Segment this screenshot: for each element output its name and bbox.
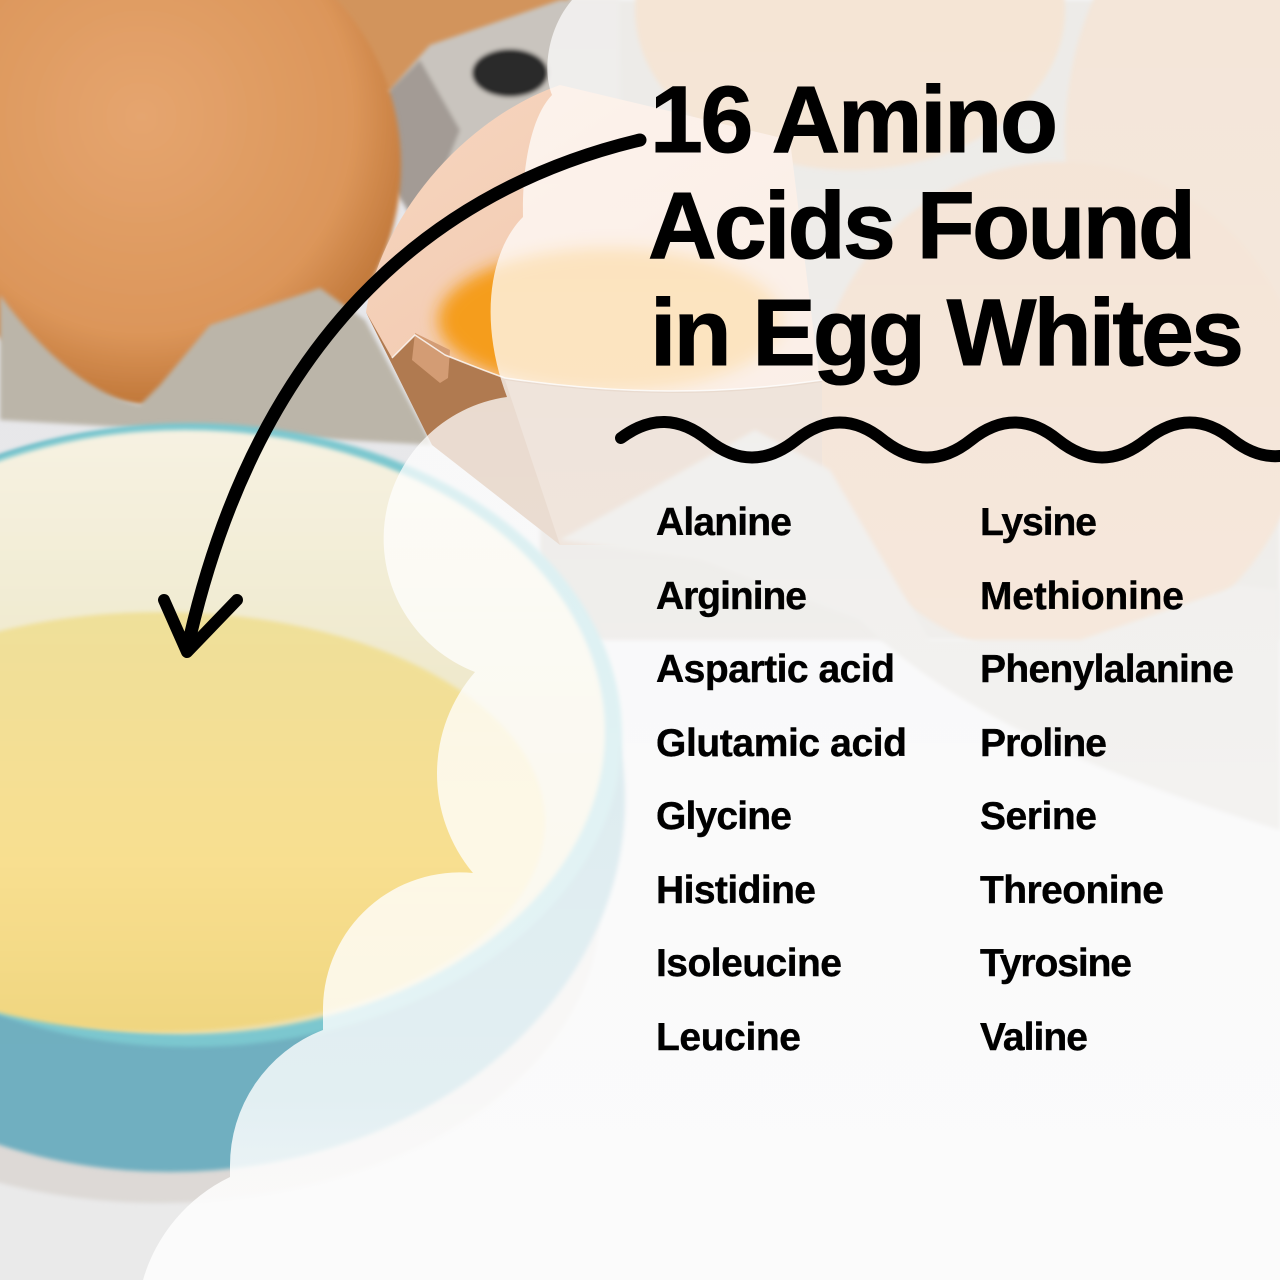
shell interior xyxy=(366,85,822,400)
amino acid list: left column: Histidine xyxy=(656,869,816,912)
carton lip right xyxy=(560,430,1280,830)
shell lower outside with crack xyxy=(366,312,822,545)
amino acid list: left column xyxy=(656,501,907,1059)
carton right side xyxy=(540,0,1280,640)
yolk xyxy=(438,248,782,392)
bowl rim xyxy=(0,423,622,1047)
bowl base xyxy=(0,617,600,1203)
carton cup with hole xyxy=(385,0,620,230)
wavy divider xyxy=(621,422,1280,458)
broken shell with yolk xyxy=(366,85,822,545)
amino acid list: right column: Serine xyxy=(980,795,1097,838)
amino acid list: right column: Phenylalanine xyxy=(980,648,1234,691)
title: in Egg Whites xyxy=(650,280,1244,386)
bowl xyxy=(0,423,625,1203)
shell flap xyxy=(412,333,450,383)
amino acid list: right column xyxy=(980,501,1234,1059)
amino acid list: left column: Glycine xyxy=(656,795,792,838)
title xyxy=(648,67,1244,386)
carton left xyxy=(0,288,432,445)
amino acid list: left column: Arginine xyxy=(656,575,807,618)
amino acid list: right column: Methionine xyxy=(980,575,1184,618)
title: Acids Found xyxy=(648,173,1196,279)
amino acid list: left column: Aspartic acid xyxy=(656,648,895,691)
amino acid list: right column: Valine xyxy=(980,1016,1088,1059)
amino acid list: left column: Isoleucine xyxy=(656,942,842,985)
brown egg xyxy=(0,0,401,406)
shell lower pale xyxy=(505,380,822,545)
amino acid list: right column: Threonine xyxy=(980,869,1164,912)
amino acid list: right column: Proline xyxy=(980,722,1107,765)
amino acid list: left column: Leucine xyxy=(656,1016,801,1059)
eggs on the right xyxy=(635,0,1280,658)
egg white liquid xyxy=(0,612,545,1032)
bowl interior xyxy=(0,430,605,1034)
amino acid list: right column: Tyrosine xyxy=(980,942,1132,985)
amino acid list: left column: Alanine xyxy=(656,501,792,544)
back egg xyxy=(275,0,575,95)
amino acid list: right column: Lysine xyxy=(980,501,1097,544)
curved arrow from title to bowl xyxy=(164,140,640,652)
crack highlight xyxy=(392,335,822,391)
amino acid list: left column: Glutamic acid xyxy=(656,722,907,765)
bowl blue band xyxy=(0,428,625,1172)
title: 16 Amino xyxy=(650,67,1058,173)
